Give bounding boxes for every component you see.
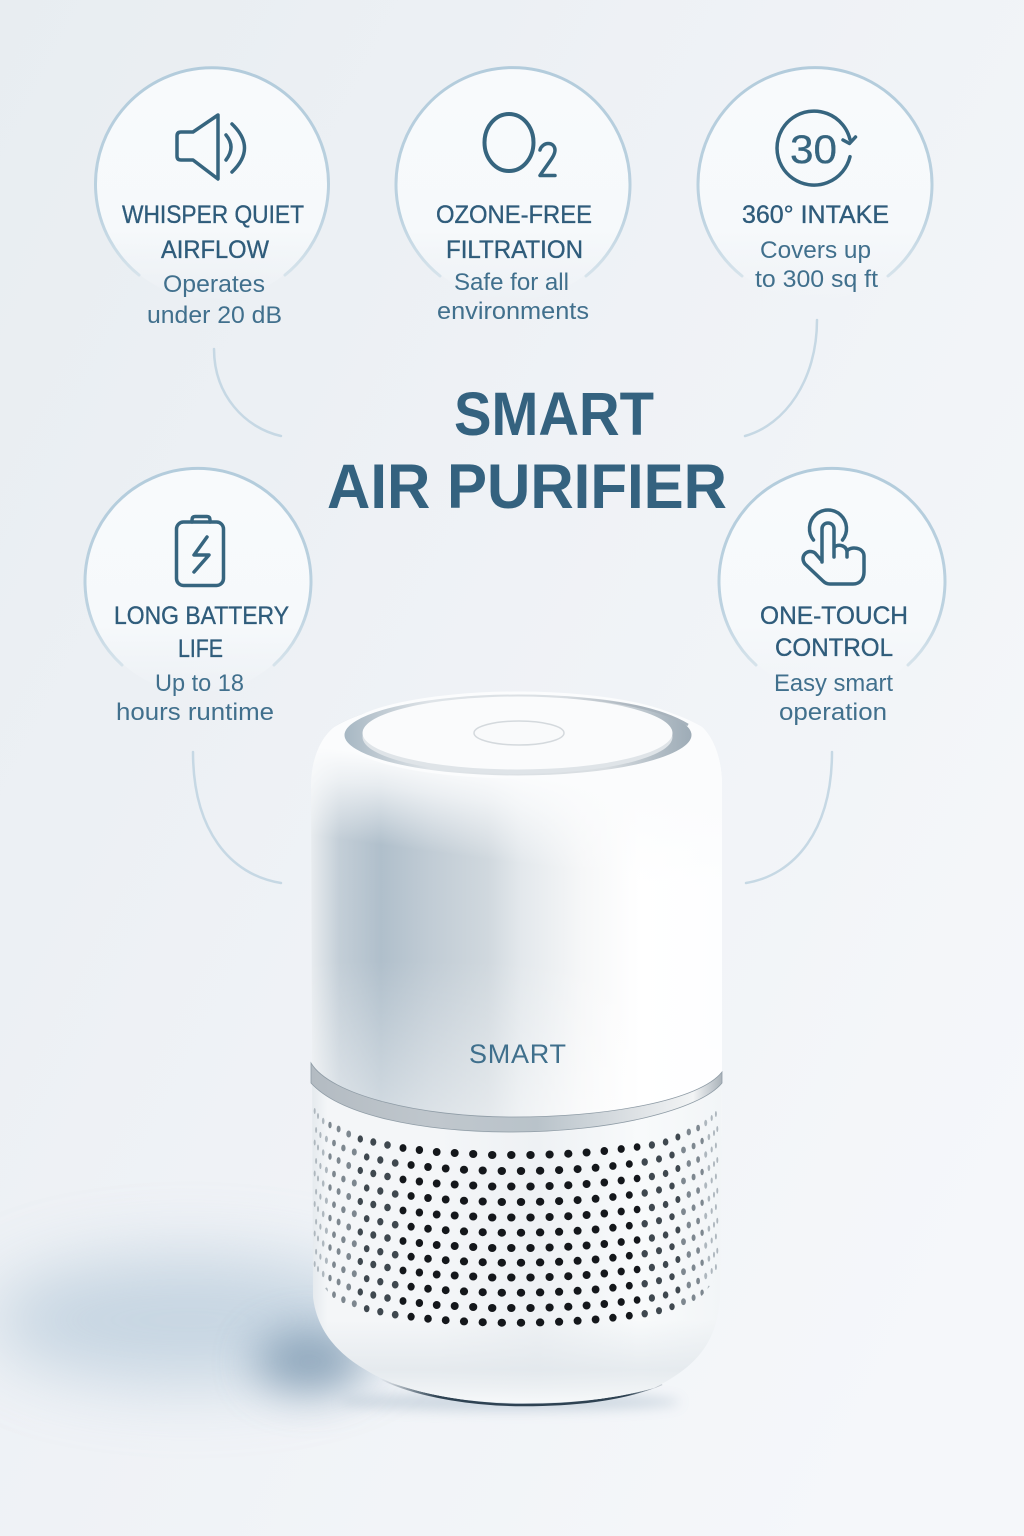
silver band (311, 1063, 722, 1132)
brand label: SMART (469, 1039, 566, 1069)
description: hours runtime (116, 699, 274, 726)
top recess (343, 693, 693, 777)
circle badge (86, 469, 310, 693)
description: Up to 18 (155, 670, 244, 697)
heading (760, 602, 908, 662)
heading: FILTRATION (446, 236, 583, 264)
description: Easy smart (774, 670, 893, 697)
connector: long battery (193, 752, 281, 883)
top disc (362, 696, 672, 774)
heading: 360° INTAKE (742, 201, 889, 229)
heading (114, 602, 289, 663)
description: Operates (163, 271, 265, 298)
heading: ONE-TOUCH (760, 602, 908, 630)
icon: O2 (484, 114, 555, 176)
description (755, 237, 878, 293)
description: environments (437, 298, 589, 325)
panel: one-touch control (719, 468, 945, 726)
description: Covers up (760, 237, 871, 264)
description (147, 271, 282, 329)
circle badge (720, 469, 944, 693)
title (327, 380, 727, 522)
circle badge (96, 68, 328, 300)
ring (719, 468, 945, 665)
icon: battery (176, 516, 224, 586)
ground contact line (380, 1378, 662, 1405)
heading: WHISPER QUIET (122, 201, 304, 229)
circle badge (699, 68, 931, 300)
connector: one-touch (746, 752, 832, 883)
heading: LONG BATTERY (114, 602, 289, 630)
heading (122, 201, 304, 264)
description: under 20 dB (147, 302, 282, 329)
air purifier device (305, 685, 730, 1410)
description: Safe for all (454, 269, 569, 296)
description (774, 670, 893, 726)
heading (436, 201, 592, 264)
perforated grille (314, 1108, 718, 1327)
panel: whisper quiet airflow (95, 68, 328, 329)
heading: OZONE-FREE (436, 201, 592, 229)
description (116, 670, 274, 726)
ring (698, 68, 932, 276)
title: AIR PURIFIER (327, 452, 727, 522)
device body (305, 685, 730, 1410)
panel: long battery life (85, 468, 311, 726)
connector: whisper quiet (214, 349, 281, 436)
description: operation (779, 699, 887, 726)
description: to 300 sq ft (755, 266, 878, 293)
ring (396, 68, 630, 276)
heading: CONTROL (775, 634, 893, 662)
connector: 360 intake (745, 320, 817, 436)
icon: touch hand (803, 510, 864, 584)
icon: speaker (177, 115, 244, 179)
description (437, 269, 589, 325)
heading: LIFE (178, 635, 223, 663)
title: SMART (454, 380, 654, 448)
center button (474, 721, 564, 745)
recess back shade (560, 697, 688, 725)
ring (95, 68, 328, 275)
ring (85, 468, 311, 665)
panel: 360 intake (698, 68, 932, 300)
floor shadow (0, 1256, 680, 1411)
circle badge (397, 68, 629, 300)
panel: ozone-free filtration (396, 68, 630, 325)
icon: 30 rotation (777, 111, 856, 185)
icon: 30 rotation: 30 (790, 128, 837, 172)
heading: AIRFLOW (161, 236, 269, 264)
